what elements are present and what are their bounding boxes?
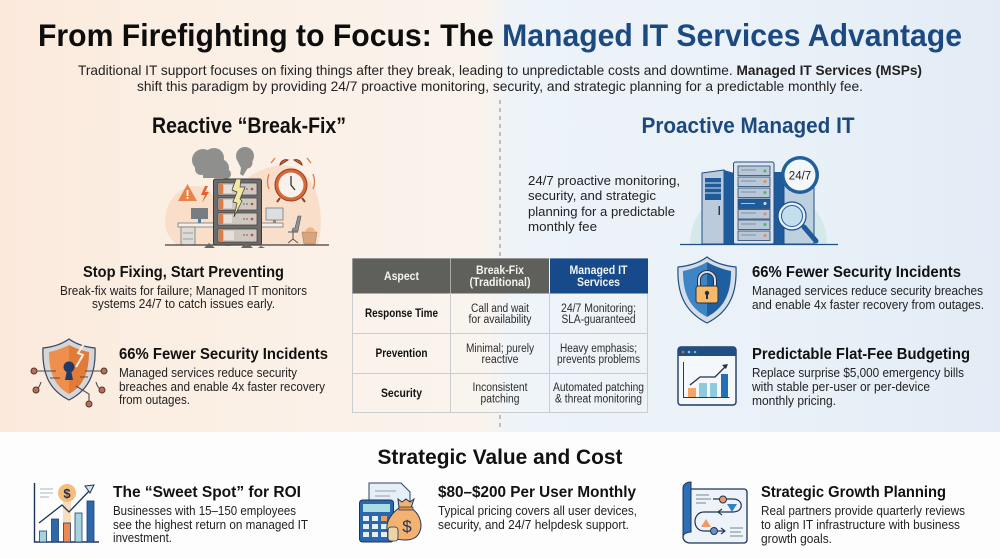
block: sweet spot: Businesses with 15–150 employees xyxy=(113,504,296,518)
header: break-fix: Break-Fix xyxy=(476,265,525,277)
row: prevention: Heavy emphasis; xyxy=(560,343,637,355)
block: stop fixing: Break-fix waits for failure; Managed IT monitors xyxy=(60,284,307,298)
block: flat-fee budgeting: monthly pricing. xyxy=(752,394,836,408)
text: proactive summary: 24/7 proactive monitoring, xyxy=(528,173,680,188)
header: break-fix: (Traditional) xyxy=(470,277,531,289)
block: left security: Managed services reduce security xyxy=(119,366,298,380)
icon: calculator and money bag xyxy=(360,483,421,542)
block: right security: 66% Fewer Security Incidents xyxy=(752,264,961,281)
block: stop fixing: systems 24/7 to catch issues early. xyxy=(92,297,275,311)
block: flat-fee budgeting xyxy=(751,346,970,408)
row: response time: Response Time xyxy=(365,308,438,320)
title: From Firefighting to Focus: The Managed IT Services Advantage xyxy=(38,17,962,53)
row: security: patching xyxy=(480,394,520,406)
icon: cracked shield xyxy=(31,339,107,407)
row: security: & threat monitoring xyxy=(555,394,642,406)
block: flat-fee budgeting: with stable per-user or per-device xyxy=(751,380,930,394)
block: stop fixing xyxy=(60,264,307,311)
block: left security: 66% Fewer Security Incidents xyxy=(119,346,328,363)
heading: reactive: Reactive “Break-Fix” xyxy=(152,113,346,138)
icon: ROI chart: $ xyxy=(63,486,71,501)
text: proactive summary: monthly fee xyxy=(528,219,597,234)
row: prevention: prevents problems xyxy=(557,354,640,366)
icon: ROI chart xyxy=(34,483,99,542)
icon: calculator and money bag: $ xyxy=(402,517,412,536)
row: response time: for availability xyxy=(468,314,532,326)
icon: blue shield with padlock xyxy=(678,257,736,323)
block: right security xyxy=(752,264,984,312)
block: right security: Managed services reduce security breaches xyxy=(752,284,983,298)
block: left security: breaches and enable 4x faster recovery xyxy=(119,380,326,394)
row: prevention xyxy=(376,343,640,366)
text: proactive summary: security, and strategic xyxy=(528,188,657,203)
block: stop fixing: Stop Fixing, Start Preventing xyxy=(83,264,284,281)
illustration: server rack with 24/7 clock xyxy=(680,156,838,244)
header: aspect xyxy=(352,258,450,294)
header: aspect: Aspect xyxy=(384,271,419,283)
text: proactive summary xyxy=(528,173,680,234)
block: growth planning: growth goals. xyxy=(761,532,832,546)
intro text: Traditional IT support focuses on fixing things after they break, leading to unpredictable costs and downtime. Managed IT Services (MSPs) xyxy=(78,62,922,78)
block: growth planning: Strategic Growth Planning xyxy=(761,484,946,501)
row: security: Automated patching xyxy=(553,382,644,394)
block: sweet spot xyxy=(113,484,308,545)
row: response time: 24/7 Monitoring; xyxy=(561,303,636,315)
row: response time: Call and wait xyxy=(471,303,530,315)
row: prevention: reactive xyxy=(482,354,518,366)
illustration: failing server with alarm clock xyxy=(165,147,329,248)
block: left security: from outages. xyxy=(119,393,190,407)
intro text xyxy=(78,62,922,94)
block: sweet spot: investment. xyxy=(113,531,172,545)
block: right security: and enable 4x faster recovery from outages. xyxy=(752,298,984,312)
block: growth planning: Real partners provide quarterly reviews xyxy=(761,504,965,518)
block: pricing: Typical pricing covers all user devices, xyxy=(438,504,637,518)
block: flat-fee budgeting: Predictable Flat-Fee Budgeting xyxy=(752,346,970,363)
block: sweet spot: The “Sweet Spot” for ROI xyxy=(113,484,301,501)
icon: growth roadmap xyxy=(683,482,747,543)
row: prevention: Minimal; purely xyxy=(466,343,534,355)
row: security: Security xyxy=(381,388,423,400)
block: left security xyxy=(119,346,328,407)
header: break-fix xyxy=(451,258,549,294)
row: security xyxy=(381,382,644,406)
heading: proactive: Proactive Managed IT xyxy=(642,113,855,138)
block: sweet spot: see the highest return on managed IT xyxy=(113,518,308,532)
header: managed IT xyxy=(550,258,648,294)
block: pricing: security, and 24/7 helpdesk support. xyxy=(438,518,629,532)
illustration: server rack with 24/7 clock: 24/7 xyxy=(789,170,811,182)
intro text: shift this paradigm by providing 24/7 proactive monitoring, security, and strategic planning for a predictable monthly fee. xyxy=(137,78,863,94)
comparison table xyxy=(352,258,648,412)
block: growth planning xyxy=(761,484,965,546)
heading: strategic value: Strategic Value and Cost xyxy=(378,446,622,469)
row: security: Inconsistent xyxy=(472,382,528,394)
row: response time xyxy=(365,303,636,326)
block: pricing xyxy=(438,484,637,532)
text: proactive summary: planning for a predictable xyxy=(528,204,675,219)
block: growth planning: to align IT infrastructure with business xyxy=(761,518,960,532)
row: prevention: Prevention xyxy=(376,348,428,360)
header: managed IT: Services xyxy=(577,277,620,289)
icon: budget chart window xyxy=(678,347,736,405)
block: flat-fee budgeting: Replace surprise $5,000 emergency bills xyxy=(752,366,964,380)
block: pricing: $80–$200 Per User Monthly xyxy=(438,484,636,501)
row: response time: SLA-guaranteed xyxy=(562,314,636,326)
header: managed IT: Managed IT xyxy=(570,265,628,277)
